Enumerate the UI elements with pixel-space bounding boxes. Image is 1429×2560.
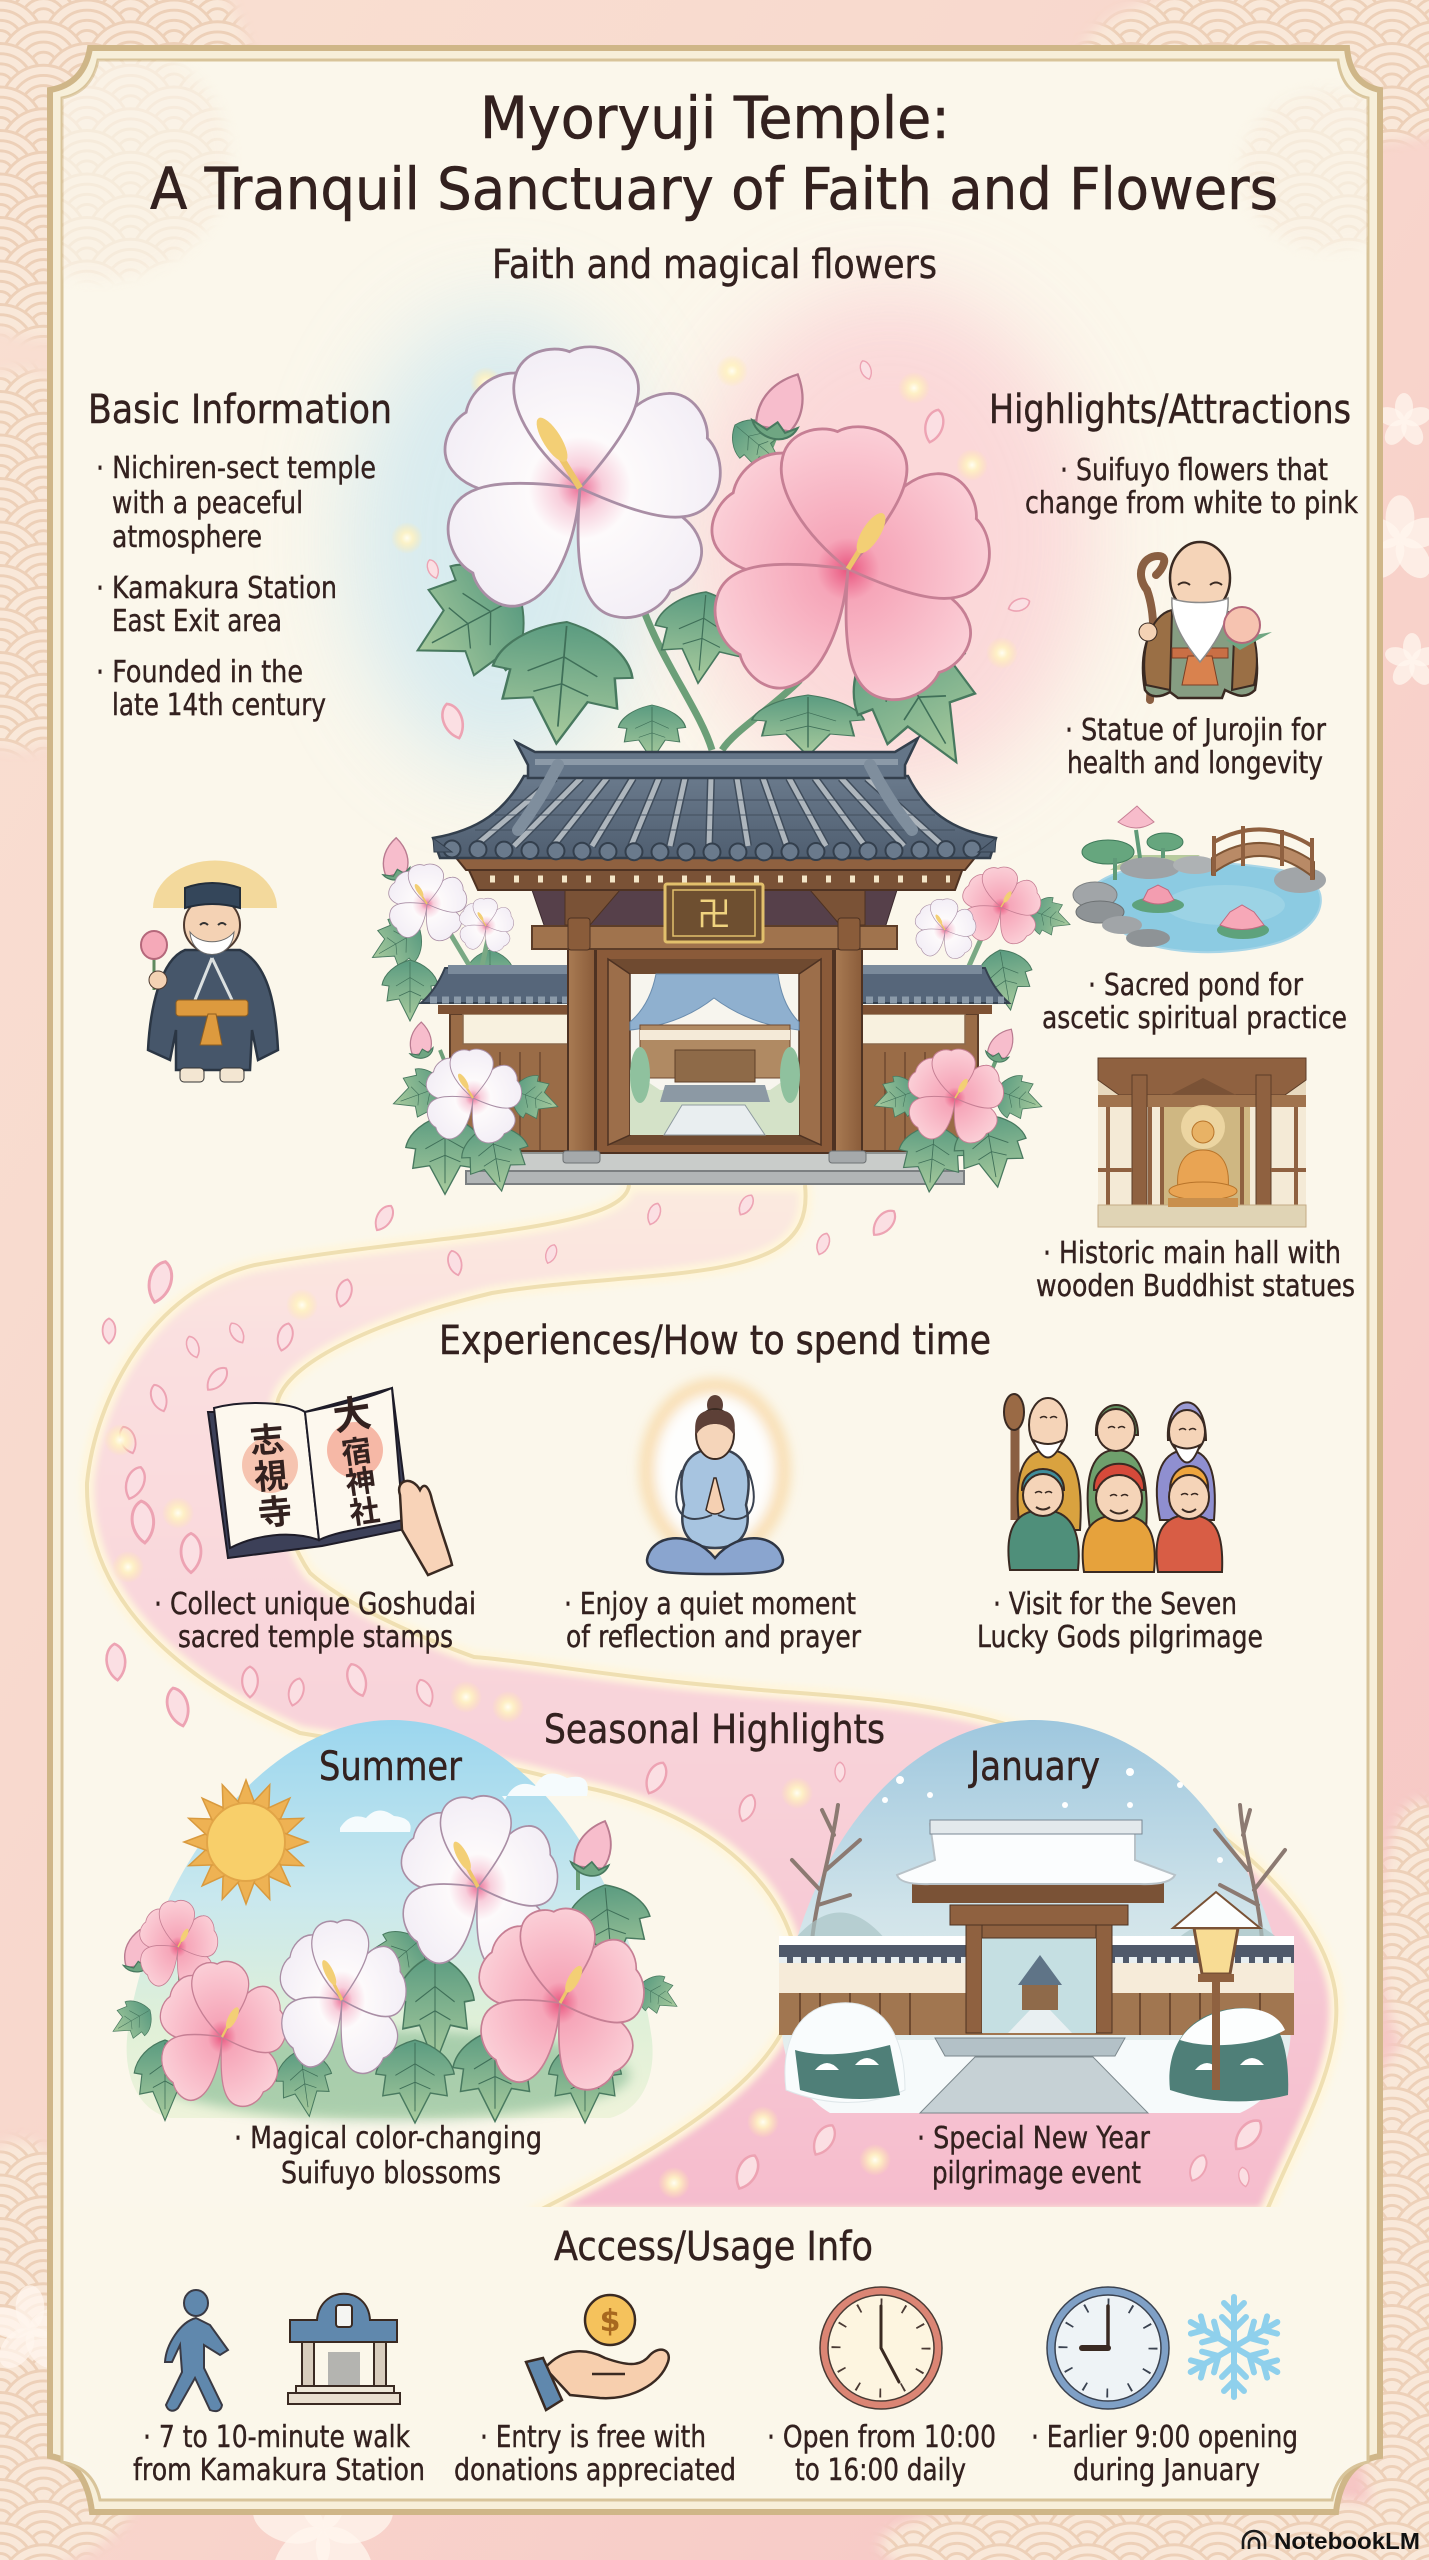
pillars: [563, 949, 866, 1163]
text block: basic information bullets: [96, 451, 376, 723]
illustration: summer dome: [103, 1720, 687, 2123]
text block: opening hours: [767, 2420, 996, 2488]
side walls: [421, 965, 1009, 1151]
text block: suifuyo flowers: [1025, 453, 1359, 521]
text block: new year event: pilgrimage event: [932, 2156, 1141, 2191]
icon: meditating figure with halo: [647, 1386, 783, 1574]
text block: Jurojin statue: health and longevity: [1067, 746, 1323, 781]
text block: goshuin: [154, 1587, 476, 1655]
text block: goshuin: sacred temple stamps: [178, 1620, 453, 1655]
text block: basic information bullets: East Exit area: [112, 604, 282, 639]
wall: [779, 1936, 1294, 2035]
winding pink petal path: [87, 1185, 1336, 2215]
summer heading: Summer: [319, 1744, 462, 1790]
bare trees: [792, 1805, 1285, 1940]
text block: goshuin: · Collect unique Goshudai: [154, 1587, 476, 1622]
icon: goshuin stamp book with hand: [208, 1388, 452, 1575]
gate: [897, 1820, 1175, 2033]
text block: basic information bullets: · Founded in the: [96, 655, 303, 690]
icon: Jurojin statue: [1139, 542, 1272, 700]
text block: seven lucky gods: · Visit for the Seven: [993, 1587, 1237, 1622]
text block: reflection: of reflection and prayer: [566, 1620, 862, 1655]
plaque with manji symbol: 卍: [697, 896, 731, 934]
icon: sun: [184, 1780, 308, 1904]
heading: experiences: Experiences/How to spend time: [439, 1318, 991, 1364]
title: Myoryuji Temple:: [480, 84, 950, 152]
distant snowy hills: [790, 1912, 1285, 1945]
text block: basic information bullets: late 14th century: [112, 688, 326, 723]
icon: seven lucky gods group: [1004, 1394, 1222, 1572]
text block: sacred pond: ascetic spiritual practice: [1042, 1001, 1347, 1036]
text block: opening hours: to 16:00 daily: [795, 2453, 966, 2488]
icon: snowflake: [1185, 2297, 1283, 2397]
illustration: January snowy gate dome: [779, 1720, 1294, 2113]
snow dots: [882, 1768, 1223, 1863]
view of main hall through gate: [630, 974, 800, 1135]
text block: free entry: donations appreciated: [454, 2453, 736, 2488]
illustration: main hall with Buddha statue: [1098, 1058, 1306, 1227]
text block: sacred pond: · Sacred pond for: [1088, 968, 1304, 1003]
text block: new year event: · Special New Year: [917, 2121, 1151, 2156]
text block: free entry: · Entry is free with: [480, 2420, 706, 2455]
text block: free entry: [454, 2420, 736, 2488]
goshuin calligraphy: [248, 1391, 382, 1534]
text block: January hours: during January: [1073, 2453, 1260, 2488]
text block: seven lucky gods: Lucky Gods pilgrimage: [977, 1620, 1263, 1655]
goshuin calligraphy: 視: [252, 1456, 290, 1498]
icon: walking person: [165, 2290, 228, 2411]
under eave and beams: [453, 854, 978, 950]
panel: experiences: [154, 1318, 1263, 1655]
side flowers behind gate: [360, 836, 1077, 1021]
snowy shrubs: [785, 2003, 1288, 2102]
goshuin calligraphy: 寺: [256, 1492, 294, 1534]
faint wave pattern inside frame: [62, 60, 1368, 280]
ground snow: [798, 2040, 1282, 2113]
hero illustration: white and pink hibiscus flowers: [390, 344, 1010, 793]
text block: January hours: [1031, 2420, 1298, 2488]
glowing sparkles: [104, 355, 1018, 2199]
text block: opening hours: · Open from 10:00: [767, 2420, 996, 2455]
text block: basic information bullets: atmosphere: [112, 520, 262, 555]
January heading: January: [967, 1744, 1100, 1790]
goshuin calligraphy: 宿: [339, 1433, 374, 1472]
text block: sacred pond: [1042, 968, 1347, 1036]
soft blue and pink glow behind hero flowers: [350, 290, 1090, 790]
panel: basic information: [88, 387, 392, 723]
icon: coin above open hand: $: [600, 2304, 620, 2339]
title: [150, 84, 1278, 223]
text block: summer blossoms: [234, 2121, 542, 2191]
scattered petals: [103, 359, 1267, 2192]
lower flowers beside gate: [385, 1021, 1050, 1197]
text block: walk from station: [133, 2420, 425, 2488]
summer flowers: [103, 1794, 687, 2123]
gate doorway: [596, 949, 833, 1153]
heading: basic information: Basic Information: [88, 387, 392, 433]
lantern: [1173, 1892, 1260, 2090]
icon: clock showing January opening: [1047, 2287, 1169, 2409]
heading: highlights attractions: Highlights/Attractions: [989, 387, 1351, 433]
text block: seven lucky gods: [977, 1587, 1263, 1655]
heading: access: Access/Usage Info: [554, 2224, 873, 2270]
panel: seasonal highlights: [103, 1707, 1294, 2191]
text block: Jurojin statue: · Statue of Jurojin for: [1065, 713, 1327, 748]
text block: main hall: · Historic main hall with: [1043, 1236, 1341, 1271]
plaque with manji symbol: [665, 884, 763, 942]
stone base: [466, 1153, 964, 1184]
logo: NotebookLM: NotebookLM: [1274, 2528, 1420, 2554]
icon: sacred pond with bridge: [1073, 806, 1326, 952]
roof: [433, 738, 996, 858]
subtitle: Faith and magical flowers: [492, 242, 937, 288]
text block: summer blossoms: · Magical color-changing: [234, 2121, 542, 2156]
icon: monk character with flower: [141, 860, 278, 1082]
goshuin calligraphy: 大: [330, 1391, 374, 1440]
text block: walk from station: · 7 to 10-minute walk: [143, 2420, 411, 2455]
goshuin calligraphy: 志: [248, 1420, 286, 1462]
text block: basic information bullets: · Nichiren-sect temple: [96, 451, 376, 486]
icon: coin above open hand: [526, 2295, 669, 2410]
illustration: temple gate: [360, 738, 1077, 1197]
text block: Jurojin statue: [1065, 713, 1327, 781]
text block: main hall: [1036, 1236, 1355, 1304]
text block: basic information bullets: · Kamakura Station: [96, 571, 337, 606]
text block: summer blossoms: Suifuyo blossoms: [281, 2156, 501, 2191]
text block: reflection: [564, 1587, 862, 1655]
panel: highlights and attractions: [989, 387, 1359, 1304]
heading: seasonal highlights: Seasonal Highlights: [544, 1707, 885, 1753]
text block: basic information bullets: with a peaceful: [112, 486, 303, 521]
text block: suifuyo flowers: change from white to pink: [1025, 486, 1359, 521]
icon: clock showing opening hours: [820, 2287, 942, 2409]
text block: reflection: · Enjoy a quiet moment: [564, 1587, 856, 1622]
text block: suifuyo flowers: · Suifuyo flowers that: [1060, 453, 1328, 488]
text block: January hours: · Earlier 9:00 opening: [1031, 2420, 1298, 2455]
text block: main hall: wooden Buddhist statues: [1036, 1269, 1355, 1304]
goshuin calligraphy: 社: [347, 1493, 382, 1532]
title: A Tranquil Sanctuary of Faith and Flowers: [150, 155, 1278, 223]
icon: train station: [288, 2294, 400, 2404]
text block: walk from station: from Kamakura Station: [133, 2453, 425, 2488]
text block: new year event: [917, 2121, 1151, 2191]
panel: access and usage info: [64, 2207, 1362, 2496]
goshuin calligraphy: 神: [343, 1463, 378, 1502]
